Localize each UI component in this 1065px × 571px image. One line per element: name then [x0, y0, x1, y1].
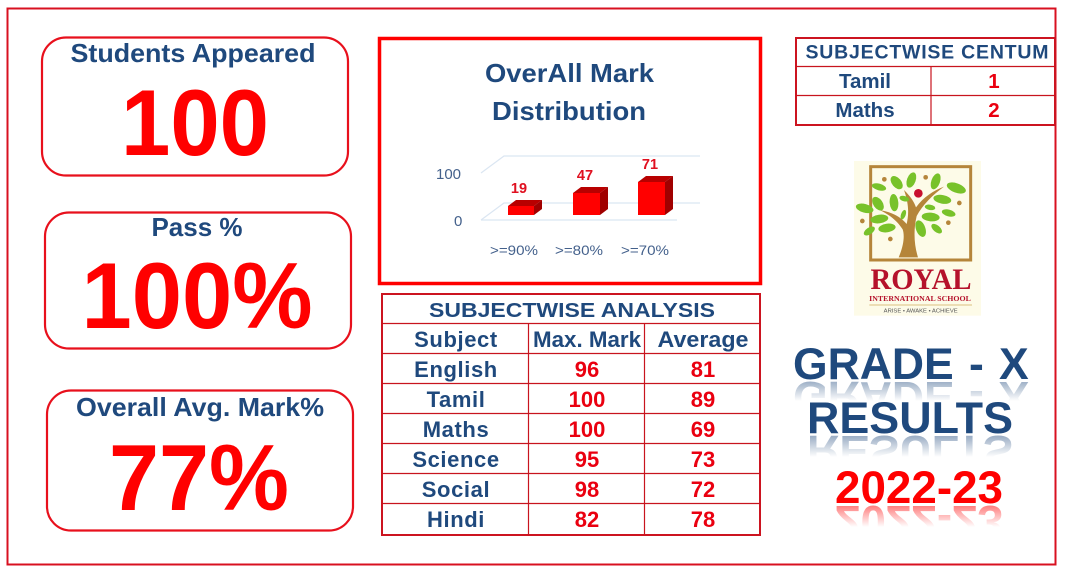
analysis table heading: SUBJECTWISE ANALYSIS — [429, 300, 715, 322]
logo leaves — [855, 171, 967, 238]
analysis column headers — [414, 327, 748, 352]
row: Science: Science — [412, 447, 500, 472]
logo tree trunk — [879, 187, 944, 257]
heading: grade X with reflection: - — [969, 372, 984, 421]
bar: 70 percent and above — [638, 157, 673, 215]
row: Science: 73 — [691, 447, 715, 472]
row: Social — [422, 477, 715, 502]
value: 77%: 77% — [109, 425, 289, 530]
heading: year 2022-23 with reflection — [835, 462, 1003, 547]
row: Social: 72 — [691, 477, 715, 502]
heading: grade X with reflection: GRADE — [793, 340, 954, 389]
logo red fruit — [914, 189, 923, 198]
analysis column headers: Max. Mark — [533, 327, 642, 352]
bar: 80 percent and above: 47 — [577, 168, 593, 184]
logo name: ROYAL: ROYAL — [870, 264, 971, 296]
chart title: Distribution — [492, 96, 646, 126]
row: English: 81 — [691, 357, 715, 382]
heading: grade X with reflection: X — [999, 340, 1029, 389]
row: Maths — [423, 417, 715, 442]
row: Hindi: 78 — [691, 507, 715, 532]
row: Tamil: 89 — [691, 387, 715, 412]
heading: grade X with reflection: X — [999, 372, 1029, 421]
panel: overall average mark — [47, 390, 353, 530]
row: Maths: 69 — [691, 417, 715, 442]
analysis column headers: Subject — [414, 327, 498, 352]
y axis labels: 100 — [436, 166, 461, 183]
row: Maths: 100 — [569, 417, 605, 442]
chart title — [485, 58, 655, 126]
logo subtitle: INTERNATIONAL SCHOOL — [869, 294, 971, 303]
row: Tamil: Tamil — [427, 387, 485, 412]
category labels: >=80% — [555, 242, 603, 258]
row: Hindi: 82 — [575, 507, 599, 532]
table: subjectwise centum — [796, 38, 1055, 125]
y axis labels: 0 — [454, 213, 462, 230]
panel: overall mark distribution chart — [380, 38, 760, 284]
heading: pass percent: Pass % — [151, 212, 243, 242]
row: Hindi: Hindi — [427, 507, 485, 532]
centum row: Tamil — [839, 70, 1000, 93]
row: Hindi — [427, 507, 715, 532]
chart title: OverAll Mark — [485, 58, 655, 88]
heading: results with reflection: RESULTS — [807, 426, 1013, 475]
chart gridlines — [481, 156, 700, 220]
centum row: Maths — [835, 99, 1000, 122]
panel: students appeared — [42, 38, 348, 176]
row: Science — [412, 447, 715, 472]
analysis column headers: Average — [658, 327, 748, 352]
heading: results with reflection — [807, 394, 1013, 475]
heading: grade X with reflection: GRADE — [793, 372, 954, 421]
heading: year 2022-23 with reflection: 2022-23 — [835, 462, 1003, 513]
centum row: Maths: Maths — [835, 99, 895, 122]
panel: pass percentage — [45, 212, 351, 348]
heading: grade X with reflection — [793, 340, 1029, 421]
category labels — [490, 242, 669, 258]
row: Tamil: 100 — [569, 387, 605, 412]
bar: 90 percent and above: 19 — [511, 181, 527, 197]
row: English — [414, 357, 715, 382]
heading: overall average: Overall Avg. Mark% — [76, 392, 324, 422]
centum row: Tamil: 1 — [988, 70, 1000, 93]
row: Science: 95 — [575, 447, 599, 472]
bar: 80 percent and above — [573, 168, 608, 215]
centum row: Maths: 2 — [988, 99, 1000, 122]
heading: grade X with reflection: - — [969, 340, 984, 389]
heading: students appeared: Students Appeared — [70, 38, 316, 68]
table: subjectwise analysis — [382, 294, 760, 535]
category labels: >=90% — [490, 242, 538, 258]
row: Tamil — [427, 387, 715, 412]
row: Social: 98 — [575, 477, 599, 502]
centum table heading: SUBJECTWISE CENTUM — [806, 42, 1048, 64]
icon: Royal International School logo — [854, 161, 981, 316]
value: 100: 100 — [121, 70, 269, 175]
value: 100%: 100% — [82, 243, 312, 348]
row: English: English — [414, 357, 498, 382]
y axis labels — [436, 166, 462, 230]
logo tagline: ARISE • AWAKE • ACHIEVE — [884, 309, 958, 315]
logo seeds — [860, 175, 962, 241]
bar: 90 percent and above — [508, 181, 542, 215]
row: English: 96 — [575, 357, 599, 382]
category labels: >=70% — [621, 242, 669, 258]
heading: year 2022-23 with reflection: 2022-23 — [835, 496, 1003, 547]
row: Maths: Maths — [423, 417, 489, 442]
row: Social: Social — [422, 477, 490, 502]
bar: 70 percent and above: 71 — [642, 157, 658, 173]
centum row: Tamil: Tamil — [839, 70, 891, 93]
heading: results with reflection: RESULTS — [807, 394, 1013, 443]
